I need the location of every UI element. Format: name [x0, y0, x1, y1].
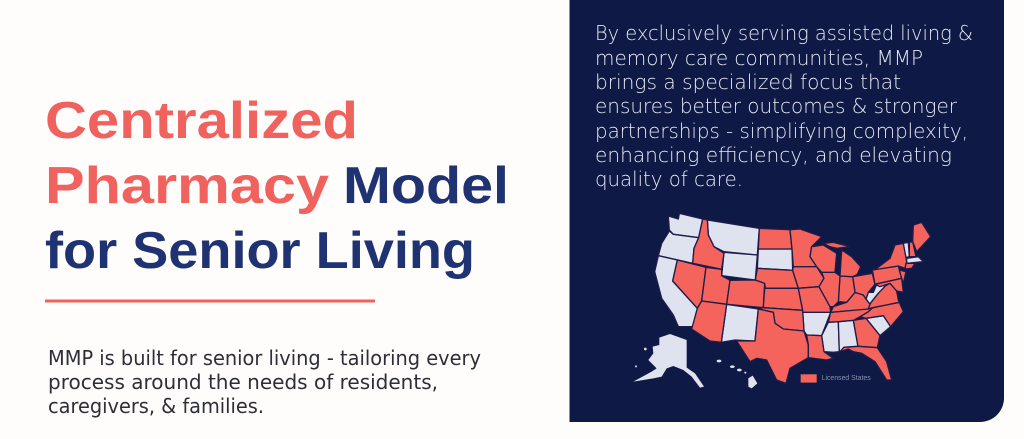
licensed states [673, 219, 931, 383]
panel text block: brings a specialized focus that [595, 70, 901, 94]
US map of licensed states [633, 213, 931, 388]
Hawaii [717, 360, 757, 388]
title underline [45, 300, 375, 302]
panel text block: By exclusively serving assisted living & [595, 21, 973, 45]
title: Model [343, 157, 509, 215]
panel text block: ensures better outcomes & stronger [595, 94, 958, 118]
panel text block: enhancing efficiency, and elevating [595, 143, 952, 167]
title: Pharmacy [45, 157, 329, 215]
map legend [801, 373, 871, 383]
intro text block: caregivers, & families. [48, 394, 264, 418]
title [45, 92, 509, 280]
intro text block [48, 346, 481, 418]
title: for Senior Living [45, 222, 475, 280]
intro text block: MMP is built for senior living - tailoring every [48, 346, 481, 370]
panel text block: memory care communities, MMP [595, 46, 923, 70]
non-licensed states [655, 213, 923, 352]
panel text block: partnerships - simplifying complexity, [595, 119, 968, 143]
panel text block: quality of care. [595, 167, 743, 191]
intro text block: process around the needs of residents, [48, 370, 438, 394]
title: Centralized [45, 92, 358, 150]
panel text block [595, 21, 973, 191]
map legend: Licensed States [822, 373, 871, 382]
Alaska [633, 334, 704, 388]
panel: navy background [570, 0, 1004, 422]
